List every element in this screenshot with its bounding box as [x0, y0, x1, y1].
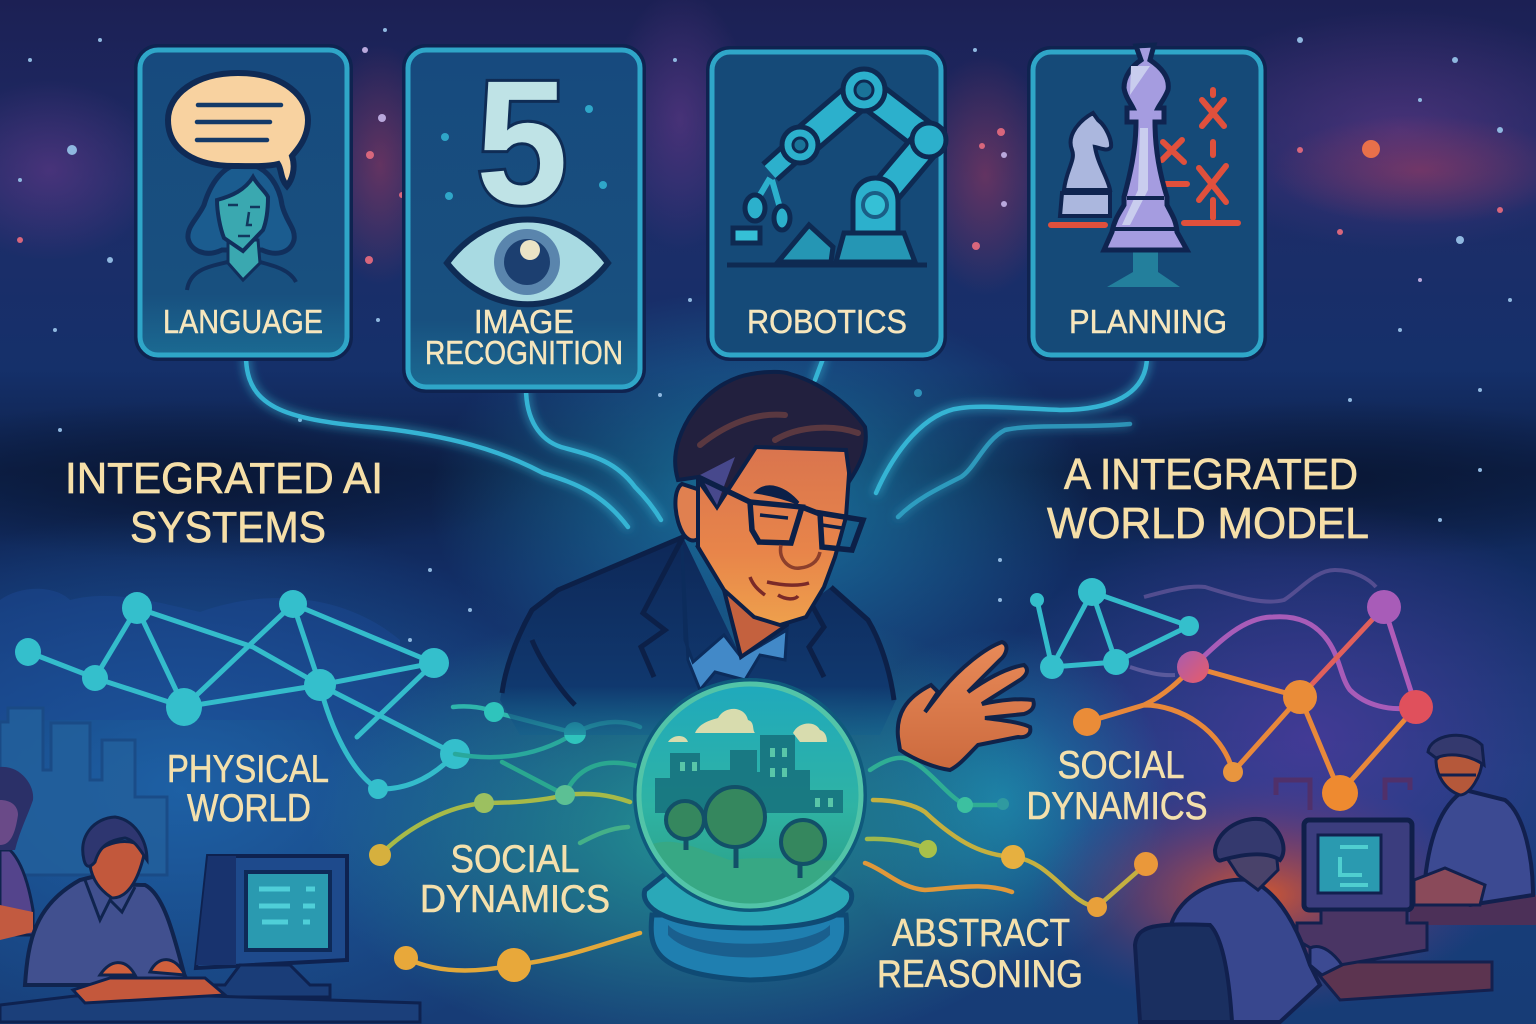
jacket outline — [502, 537, 894, 700]
ear — [675, 484, 702, 540]
hill — [650, 842, 842, 905]
accent star — [1362, 140, 1380, 158]
network: right orbit links — [865, 758, 1158, 917]
label: social dynamics right — [1026, 744, 1208, 828]
desk — [1308, 962, 1492, 1000]
label: language: LANGUAGE — [163, 303, 323, 340]
icon: number five: 5 — [476, 45, 568, 241]
icon: chess king piece — [1104, 45, 1187, 250]
label: physical world: WORLD — [187, 787, 311, 830]
connector wires from panels to head — [246, 356, 1147, 527]
label: abstract reasoning: ABSTRACT — [892, 912, 1070, 955]
standing worker — [1414, 735, 1533, 905]
heading: integrated ai systems — [65, 454, 383, 552]
label: abstract reasoning: REASONING — [877, 953, 1083, 996]
label: image recognition: RECOGNITION — [425, 334, 623, 371]
right workers — [1135, 735, 1536, 1022]
eyes and brow — [757, 487, 842, 528]
label: physical world — [167, 748, 329, 830]
label: planning: PLANNING — [1069, 303, 1227, 340]
hair — [675, 372, 866, 507]
icon: robot arm — [733, 69, 946, 262]
background buildings — [1276, 780, 1410, 810]
trees — [666, 787, 825, 878]
left clouds — [0, 589, 400, 720]
worker torso — [25, 875, 187, 985]
icon: eye — [447, 220, 608, 304]
panel: planning — [1033, 45, 1261, 355]
sphere rim — [639, 684, 861, 906]
man examining globe — [500, 372, 896, 735]
desk — [0, 996, 420, 1022]
heading: a integrated world model: WORLD MODEL — [1047, 499, 1369, 548]
icon: red tactic marks — [1051, 90, 1238, 225]
panel sparkles — [441, 105, 607, 200]
panel: language — [140, 50, 347, 355]
label: social dynamics left: SOCIAL — [450, 838, 580, 881]
left skyline — [0, 708, 167, 875]
icon: knight piece — [1060, 113, 1111, 216]
nose — [781, 545, 820, 568]
icon: speech bubble — [168, 73, 308, 186]
icon: woman — [187, 163, 296, 290]
lapels — [532, 537, 824, 705]
heading: a integrated world model: A INTEGRATED — [1064, 450, 1358, 499]
jacket — [500, 537, 896, 735]
worker head — [83, 817, 147, 898]
worker hands — [100, 960, 185, 975]
glasses — [698, 477, 863, 550]
worker: left background figure — [0, 767, 33, 940]
network: world model — [1030, 570, 1433, 811]
label: abstract reasoning — [877, 912, 1083, 996]
neck — [698, 540, 790, 657]
heading: integrated ai systems: SYSTEMS — [130, 503, 326, 552]
label: social dynamics left — [420, 838, 610, 921]
panel: image recognition — [408, 45, 640, 387]
shirt collar — [682, 545, 787, 690]
label: image recognition — [425, 303, 623, 371]
sphere — [637, 682, 863, 908]
label: social dynamics right: SOCIAL — [1058, 744, 1184, 787]
label: robotics: ROBOTICS — [747, 303, 907, 340]
hand — [898, 642, 1034, 770]
left desk and worker — [0, 817, 420, 1022]
city — [655, 735, 843, 813]
heading: a integrated world model — [1047, 450, 1369, 548]
label: image recognition: IMAGE — [474, 303, 574, 340]
clouds — [668, 709, 827, 742]
stars — [17, 28, 1512, 642]
base — [644, 870, 852, 980]
face — [698, 445, 850, 625]
mouth — [750, 577, 809, 599]
chair — [1135, 924, 1232, 1022]
network: physical world — [15, 590, 470, 799]
label: social dynamics right: DYNAMICS — [1026, 785, 1208, 828]
ground line — [727, 262, 927, 268]
icon: pedestal — [1107, 250, 1180, 287]
label: social dynamics left: DYNAMICS — [420, 878, 610, 921]
keyboard — [73, 978, 225, 1003]
monitor — [196, 856, 347, 997]
network: left orbit links — [369, 702, 640, 982]
seated worker — [1171, 819, 1342, 1022]
crystal globe — [637, 682, 863, 980]
heading: integrated ai systems: INTEGRATED AI — [65, 454, 383, 503]
worker collar — [85, 880, 135, 920]
panel: robotics — [712, 52, 946, 355]
label: physical world: PHYSICAL — [167, 748, 329, 791]
monitor — [1297, 820, 1427, 965]
desk back — [1410, 895, 1536, 925]
